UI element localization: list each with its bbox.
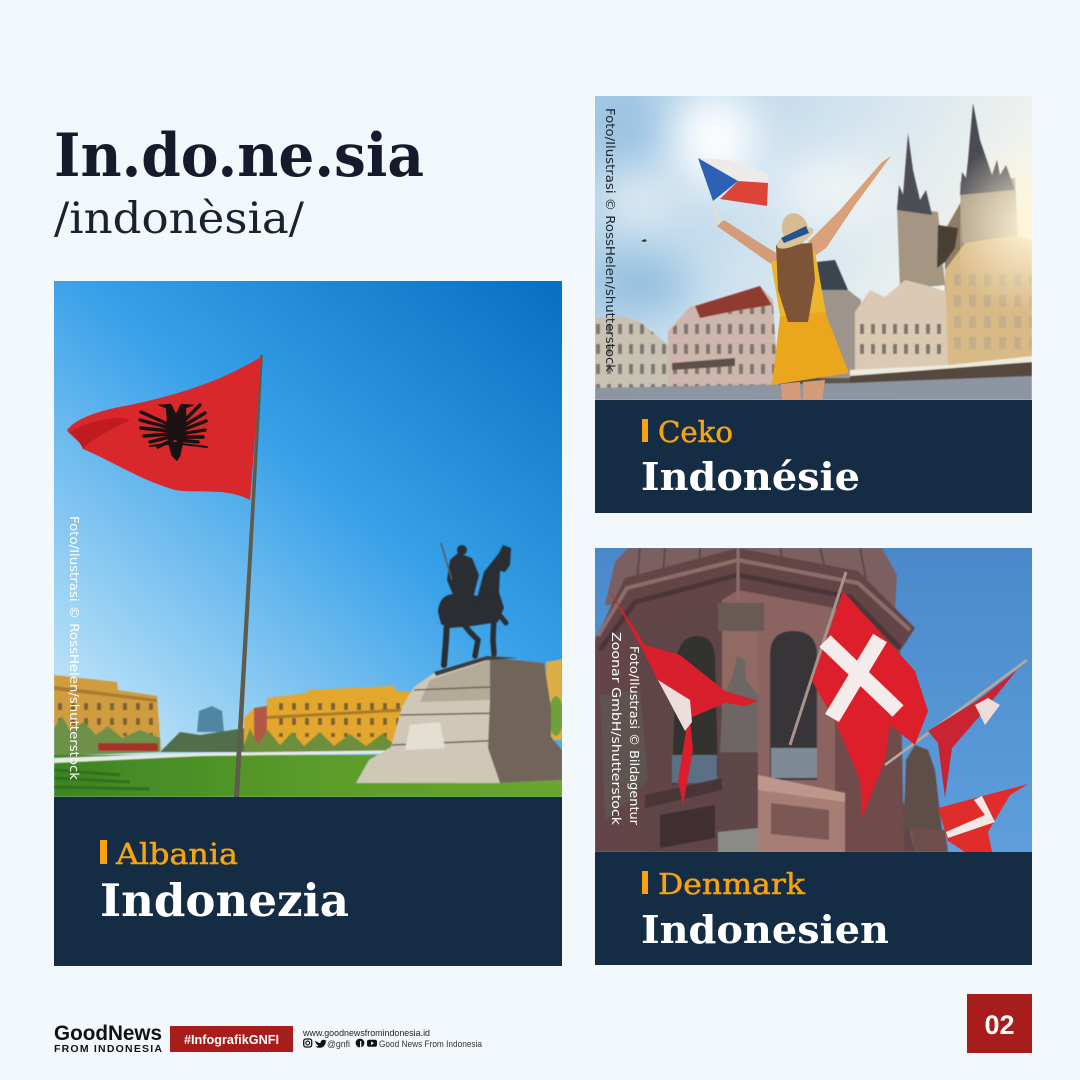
icon: instagram — [304, 1039, 312, 1047]
country name: Ceko — [658, 415, 733, 449]
flag poles — [885, 660, 1027, 765]
logo: GoodNews From Indonesia: FROM INDONESIA — [54, 1043, 162, 1055]
photo credits: Zoonar GmbH/shutterstock — [609, 632, 623, 825]
large Danish flag — [812, 591, 928, 818]
statues — [720, 656, 758, 752]
accent bar — [642, 419, 648, 442]
hashtag tag: #InfografikGNFI — [184, 1033, 279, 1047]
Czech flag — [698, 158, 768, 206]
rock plinth — [356, 657, 562, 783]
title: In.do.ne.sia: In.do.ne.sia — [54, 121, 424, 191]
lower right Danish flag — [938, 784, 1028, 852]
flag pole — [234, 355, 263, 797]
label band — [54, 797, 562, 966]
tower body — [595, 548, 915, 852]
footer — [54, 1022, 483, 1055]
translated word: Indonezia — [100, 874, 349, 927]
icon: twitter — [315, 1040, 326, 1048]
photo: Prague square with woman and Czech flag — [590, 90, 1032, 400]
left Danish flag — [608, 588, 758, 805]
white wall — [54, 750, 420, 763]
photo credits — [609, 632, 641, 825]
centre yellow building — [244, 686, 413, 752]
photo credit: Foto/Ilustrasi © RossHelen/shutterstock — [603, 108, 617, 372]
logo: GoodNews From Indonesia — [54, 1022, 162, 1055]
cornice lines — [598, 560, 910, 636]
translated word: Indonesien — [641, 907, 889, 952]
pronunciation: /indonèsia/ — [54, 194, 305, 244]
icon: youtube — [367, 1040, 377, 1047]
centre column — [722, 625, 758, 755]
page number: 02 — [984, 1010, 1015, 1040]
photo credit: Foto/Ilustrasi © RossHelen/shutterstock — [67, 516, 81, 780]
right Danish flag — [928, 670, 1017, 798]
woman — [717, 156, 891, 400]
ledges and panels — [758, 790, 846, 852]
title block — [54, 121, 424, 244]
dome — [605, 548, 897, 610]
base fill behind buildings — [777, 377, 851, 386]
panel: Ceko — [590, 90, 1032, 513]
translated word: Indonésie — [641, 454, 860, 499]
icon: facebook — [356, 1039, 364, 1047]
photo: Copenhagen tower with Danish flags — [595, 548, 1032, 852]
photo credits: Foto/Ilustrasi © Bildagentur — [627, 646, 641, 825]
country name: Albania — [115, 837, 238, 871]
panel: Denmark — [595, 548, 1032, 965]
dark roofed building behind — [817, 260, 861, 378]
website: www.goodnewsfromindonesia.id — [302, 1028, 430, 1039]
arched windows — [770, 631, 817, 780]
logo: GoodNews From Indonesia: GoodNews — [54, 1022, 162, 1045]
accent bar — [100, 840, 107, 864]
stepped-gable building — [855, 280, 950, 378]
panel: Albania — [54, 281, 563, 966]
bird — [641, 239, 647, 242]
Albanian flag — [67, 357, 261, 500]
hat — [782, 213, 808, 245]
sun-lit tan building — [945, 235, 1032, 365]
social handle: @gnfi — [327, 1039, 350, 1050]
eagle emblem — [140, 404, 207, 461]
towers — [897, 206, 945, 290]
label band — [595, 400, 1032, 513]
left pale buildings — [595, 316, 668, 390]
page number — [967, 994, 1032, 1053]
paving — [595, 376, 1032, 400]
accent bar — [642, 871, 648, 894]
horse and rider statue — [438, 545, 511, 665]
distant tower and trees — [197, 706, 224, 732]
baroque palace — [668, 286, 778, 389]
balcony railings — [771, 748, 817, 778]
flag staff — [712, 201, 720, 225]
country name: Denmark — [658, 867, 805, 901]
right building — [546, 659, 562, 740]
social page name: Good News From Indonesia — [379, 1039, 483, 1050]
label band — [595, 852, 1032, 965]
lawn — [54, 755, 562, 797]
left yellow building — [54, 675, 161, 754]
hashtag tag — [170, 1026, 293, 1052]
photo: Tirana square with Albanian flag and statue — [54, 281, 563, 797]
